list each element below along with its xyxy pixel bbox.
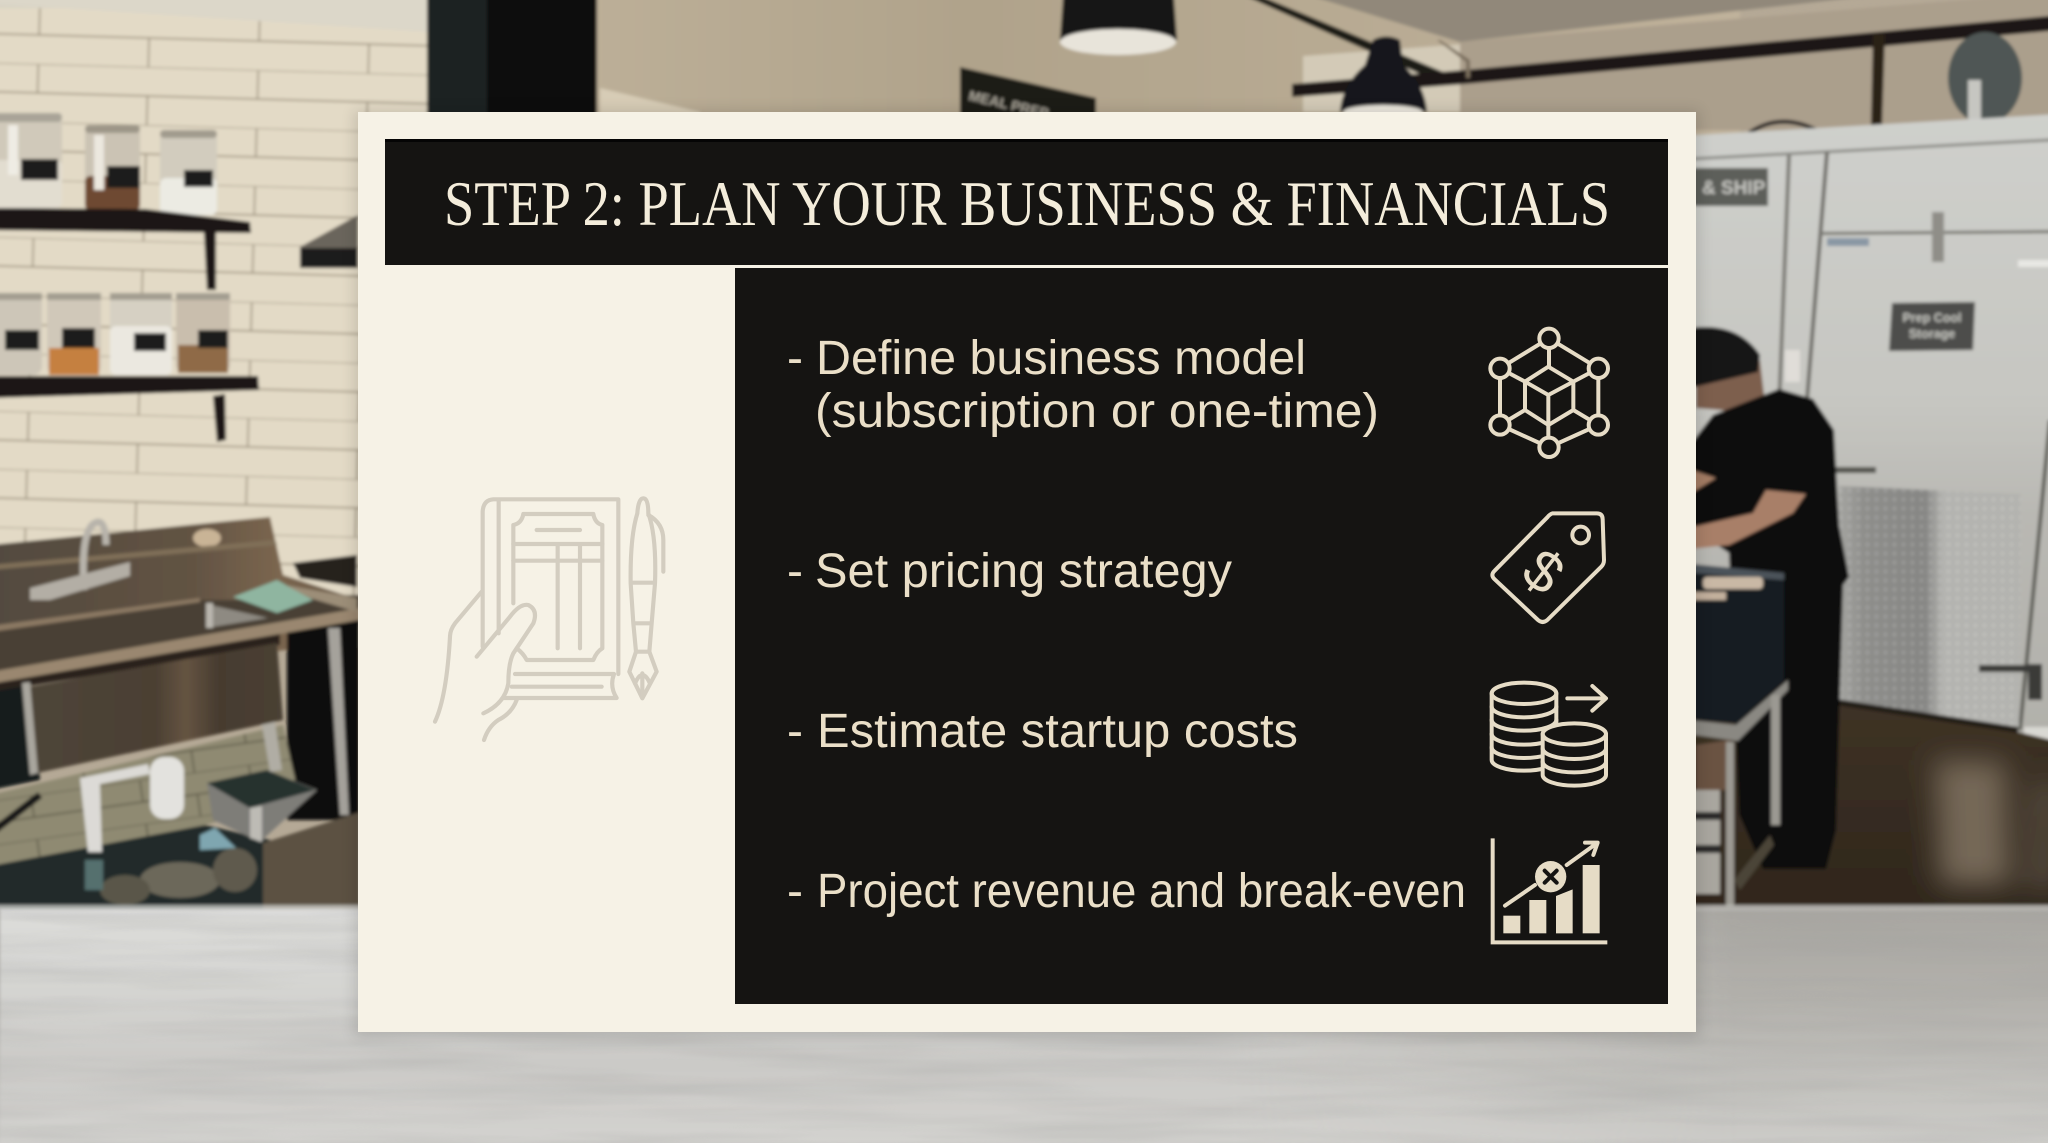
icon: break-even chart xyxy=(1493,838,1607,942)
steel cart xyxy=(1680,680,1788,741)
duct xyxy=(1948,32,2022,124)
burner at right xyxy=(293,555,357,587)
header bar xyxy=(385,139,1668,265)
counter top xyxy=(0,909,2048,1143)
crate of meal boxes xyxy=(1680,563,1788,906)
dark behind xyxy=(287,612,360,820)
tiles beyond the pillar xyxy=(600,88,700,130)
wall sign xyxy=(960,67,1096,130)
towel xyxy=(233,580,313,613)
icon: coin stacks xyxy=(1492,683,1606,786)
wall corner xyxy=(1303,44,1470,112)
wall sign: MEAL PREP xyxy=(967,87,1050,121)
deck xyxy=(0,595,360,672)
list item: define business model: - xyxy=(787,332,803,385)
diamond plate xyxy=(1836,486,2042,727)
walk-in fridge xyxy=(1680,114,2048,760)
dark counter below xyxy=(0,825,270,915)
fridge sign: ship: & SHIP xyxy=(1702,178,1766,199)
list item: startup costs: Estimate startup costs xyxy=(817,705,1298,758)
shop floor xyxy=(1680,690,2048,915)
bowl front xyxy=(28,643,283,773)
counter marble mottling xyxy=(0,910,2048,1143)
pipe cable xyxy=(0,795,40,830)
fridge sign: ship xyxy=(1680,168,1768,206)
lower tile wall xyxy=(0,725,300,866)
basin highlight xyxy=(206,604,268,628)
pendant lamp left xyxy=(1060,0,1177,55)
black cable on fridge top xyxy=(1749,122,1816,133)
fridge sign: storage xyxy=(1889,302,1975,351)
backsplash xyxy=(0,517,360,690)
list item: define business model: Define business model xyxy=(816,332,1306,385)
panel: checklist xyxy=(735,268,1668,1004)
icon: price tag: $ xyxy=(1511,536,1576,607)
fridge sign: storage: Prep Cool xyxy=(1902,311,1962,325)
rim edge xyxy=(0,608,360,684)
icon: network cube xyxy=(1490,329,1608,457)
list item: startup costs: - xyxy=(787,705,803,758)
metal bin xyxy=(207,770,317,842)
white drain pipe xyxy=(80,764,150,852)
lower right block xyxy=(263,812,360,915)
list item: pricing: Set pricing strategy xyxy=(815,545,1232,598)
icon: price tag xyxy=(1492,513,1604,622)
dark pillar xyxy=(427,0,487,130)
worker xyxy=(1680,327,1849,869)
fridge sign: storage: Storage xyxy=(1909,327,1955,341)
upper wall band xyxy=(0,0,430,30)
steel sink xyxy=(0,517,360,915)
faucet xyxy=(83,522,106,590)
pipes xyxy=(1232,0,1448,82)
list item: pricing: - xyxy=(787,545,803,598)
title: STEP 2: PLAN YOUR BUSINESS & FINANCIALS xyxy=(444,169,1610,239)
cream card xyxy=(358,112,1696,1032)
list item: define business model xyxy=(787,332,1379,438)
kitchen wall: middle xyxy=(340,0,1740,930)
pendant lamp right xyxy=(1340,36,1427,119)
wall shelves with jars xyxy=(0,113,358,442)
ceiling xyxy=(1227,0,2048,42)
illustration: hand holding planner with fountain pen xyxy=(435,498,663,740)
subway tile wall xyxy=(0,8,430,648)
list item: define business model: (subscription or one-time) xyxy=(815,385,1379,438)
card shadow xyxy=(354,110,1700,1038)
list item: revenue and break-even: - xyxy=(787,865,803,918)
list item: revenue and break-even: Project revenue and break-even xyxy=(817,865,1466,918)
